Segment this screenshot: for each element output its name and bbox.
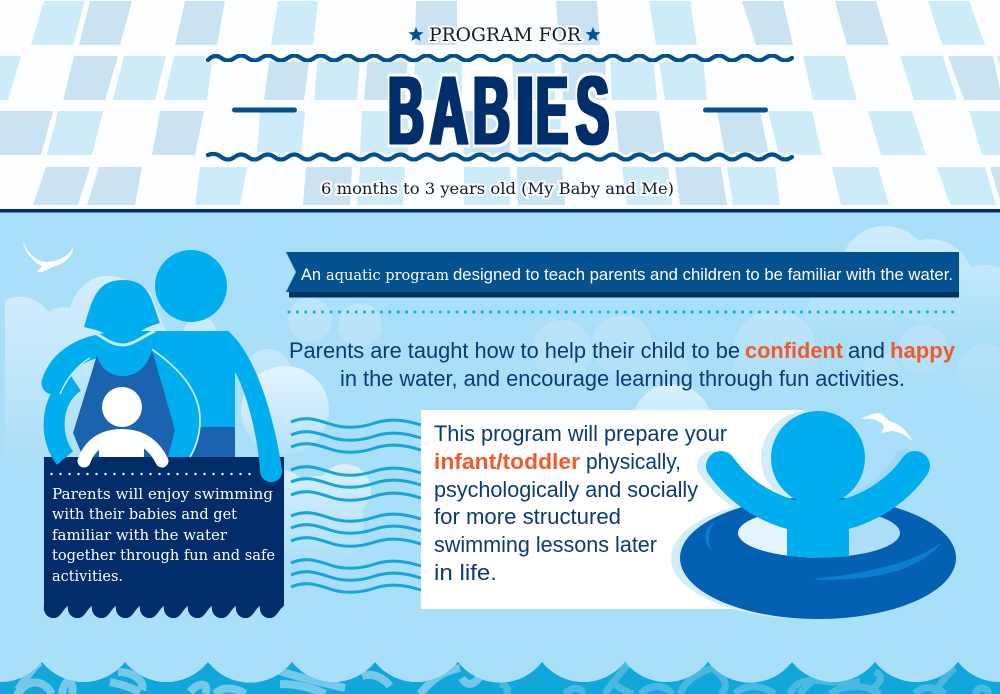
mother neck	[96, 340, 155, 376]
arm highlight	[60, 358, 90, 394]
dash right	[703, 108, 768, 112]
head shadow	[761, 411, 855, 505]
title: E	[536, 56, 568, 165]
banner: designed to teach parents and children to be familiar with the water.	[453, 265, 953, 284]
panel: parents text box: Parents will enjoy swimming	[52, 486, 274, 503]
panel: parents text box	[44, 457, 284, 618]
body background	[0, 210, 1000, 694]
program text: swimming lessons later	[434, 532, 657, 557]
child head	[771, 411, 865, 505]
icon: bird right	[860, 413, 913, 442]
panel: parents text box: familiar with the water	[52, 527, 228, 544]
illustration: child in swim ring	[671, 411, 956, 619]
header divider line	[0, 209, 1000, 212]
mother swimsuit	[73, 350, 175, 457]
program text: in life.	[434, 560, 497, 585]
dash left	[232, 108, 297, 112]
ring hole	[738, 508, 900, 558]
panel: white program box	[421, 410, 803, 609]
program text: infant/toddler	[434, 449, 580, 474]
icon: left star	[408, 27, 424, 41]
ring highlight left	[705, 521, 716, 551]
icon: bird left	[23, 240, 73, 272]
banner: aquatic program	[326, 268, 449, 284]
title: A	[430, 56, 468, 165]
panel: parents text box: activities.	[52, 568, 123, 585]
title: S	[576, 56, 609, 165]
title: B	[473, 56, 510, 165]
panel: parents text box: with their babies and get	[52, 506, 237, 523]
title: B	[388, 56, 424, 165]
intro paragraph: and	[848, 338, 885, 363]
ring highlight right	[815, 544, 940, 579]
wavy line top	[208, 56, 792, 60]
father head	[155, 250, 227, 322]
title	[388, 56, 609, 165]
program-for heading: PROGRAM FOR	[429, 25, 582, 46]
header background	[0, 0, 1000, 210]
panel: parents text box: together through fun and safe	[52, 547, 275, 564]
program text	[434, 421, 727, 585]
right arm shadow	[835, 460, 905, 510]
banner	[286, 252, 959, 298]
intro paragraph: in the water, and encourage learning through fun activities.	[340, 366, 905, 391]
child torso	[787, 510, 849, 557]
father shorts	[188, 427, 235, 457]
intro paragraph	[289, 338, 955, 391]
left arm shadow	[712, 466, 818, 518]
wavy line bottom	[208, 154, 792, 160]
program text: psychologically and socially	[434, 477, 699, 502]
baby	[84, 387, 162, 461]
program text: for more structured	[434, 504, 621, 529]
banner: An	[301, 265, 321, 284]
dotted divider	[289, 310, 958, 314]
mother right arm	[150, 348, 200, 457]
subtitle: 6 months to 3 years old (My Baby and Me)	[321, 179, 674, 198]
intro paragraph: happy	[890, 338, 955, 363]
mother left arm	[54, 382, 75, 458]
child arms	[721, 466, 915, 518]
arm outline	[150, 348, 200, 457]
background clouds	[5, 226, 1000, 568]
title: I	[515, 56, 535, 165]
mother hair	[84, 280, 160, 341]
intro paragraph: Parents are taught how to help their child to be	[289, 338, 740, 363]
father body and arm	[97, 331, 282, 482]
bottom water waves	[0, 662, 1000, 694]
decorative water waves	[291, 419, 421, 592]
swim ring	[680, 497, 956, 619]
father arm over shoulder	[53, 345, 112, 383]
program text: This program will prepare your	[434, 421, 727, 446]
tile pattern	[0, 1, 1000, 205]
ring shadow	[671, 497, 947, 619]
illustration: family	[53, 250, 282, 482]
intro paragraph: confident	[745, 338, 843, 363]
hair outline	[97, 331, 155, 345]
program text: physically,	[586, 449, 681, 474]
